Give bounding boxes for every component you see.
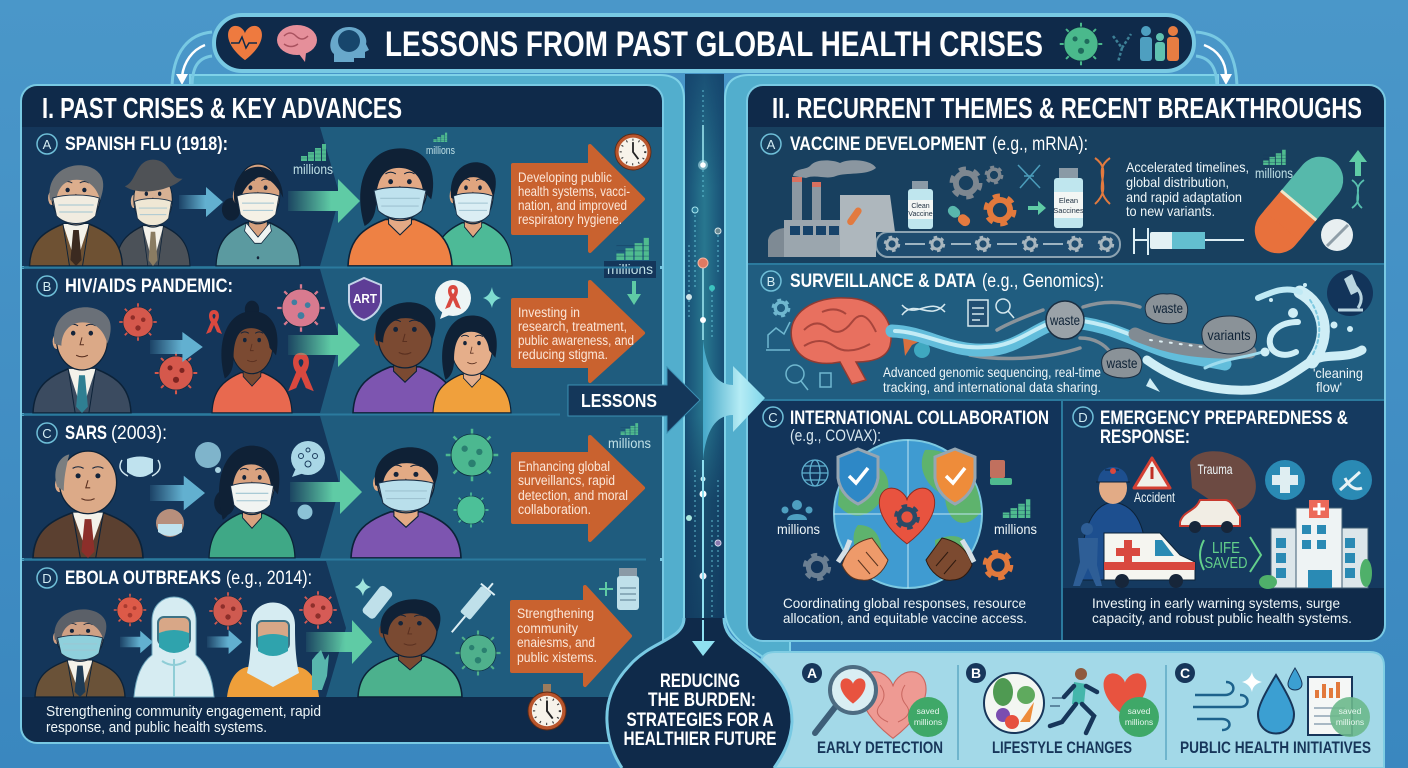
strategy A: early detection [802, 663, 948, 757]
millions icon small: millions [426, 145, 455, 157]
badge: saved millions: millions [1336, 717, 1364, 727]
millions icon: millions [1255, 165, 1293, 181]
description: capacity, and robust public health systems. [1092, 610, 1352, 626]
green arrow [1028, 201, 1046, 215]
badge: A [807, 665, 817, 681]
icon: small drop [1288, 668, 1302, 690]
trauma cloud [1190, 451, 1256, 510]
heading: (e.g., COVAX): [790, 426, 881, 445]
advance text [517, 606, 597, 665]
section heading band [22, 86, 662, 127]
row C: SARS [33, 423, 651, 558]
millions badge between rows [604, 238, 656, 305]
row B badge [37, 276, 57, 296]
callout text [624, 671, 776, 750]
arrow [150, 476, 205, 510]
icon: large ribbon [288, 353, 314, 391]
badge [761, 271, 781, 291]
badge: saved millions [1119, 697, 1159, 737]
water swirl [1147, 290, 1362, 390]
badge [1073, 407, 1093, 427]
strategy C: public health initiatives [1175, 663, 1371, 757]
icon: ART shield: ART [353, 291, 377, 306]
advance text: surveillancs, rapid [518, 473, 615, 488]
millions icon [293, 144, 333, 177]
badge: saved millions: saved [917, 706, 940, 716]
arrow: flow to right panel [703, 340, 765, 460]
advance text: Enhancing global [518, 459, 610, 474]
figure: woman [212, 301, 292, 413]
icon: red virus [299, 591, 337, 629]
clean water flow [892, 320, 1250, 364]
footer band [22, 697, 662, 742]
icon: stopwatch [528, 684, 566, 730]
brain [791, 298, 891, 384]
icon: microscope [1327, 270, 1373, 316]
badge: B [767, 274, 775, 289]
icon: people and millions: millions [777, 521, 820, 537]
icon: red virus [114, 594, 146, 626]
advance text: Strengthening [517, 606, 594, 621]
icon: data blocks [990, 460, 1012, 485]
icon: orange gear [985, 552, 1011, 578]
icon: virus [1060, 23, 1102, 65]
tablet [1321, 219, 1353, 251]
theme A: vaccine development [761, 134, 1367, 263]
figure: man in purple [353, 302, 457, 413]
icon: report chart [1308, 677, 1352, 735]
icon: head [330, 27, 369, 62]
panel: past crises and key advances [22, 86, 662, 742]
icon: plate of food [984, 673, 1044, 733]
millions icon [1255, 150, 1293, 181]
label: EARLY DETECTION [817, 738, 943, 757]
description [883, 364, 1101, 395]
vial right: Saccines [1053, 206, 1084, 215]
figure: hazmat worker [134, 597, 214, 697]
row D background [22, 561, 662, 697]
vial left: Clean [911, 203, 930, 210]
icon: speech bubble [291, 441, 325, 477]
capsule [1245, 147, 1353, 263]
callout text: STRATEGIES FOR A [626, 710, 774, 731]
icon: heart [1104, 673, 1146, 717]
waste cloud lower [1102, 348, 1142, 378]
row D: Ebola [35, 568, 639, 697]
badge: C [1180, 665, 1190, 681]
advance arrow [513, 146, 643, 251]
advance text: enaiesms, and [517, 635, 595, 650]
row C heading [65, 423, 167, 444]
description: Investing in early warning systems, surge [1092, 595, 1340, 611]
row A background [22, 127, 662, 266]
icon: instruments circle [1332, 460, 1372, 500]
row B heading: HIV/AIDS PANDEMIC: [65, 276, 233, 297]
arrow [306, 620, 372, 664]
section heading band [748, 86, 1384, 127]
advance text: public xistems. [517, 650, 597, 665]
section heading: I. PAST CRISES & KEY ADVANCES [42, 93, 402, 125]
small pill [946, 204, 972, 228]
icon: small globe [802, 460, 828, 486]
arrow: lessons: LESSONS [581, 391, 657, 411]
advance text: public awareness, and [518, 333, 634, 348]
description: allocation, and equitable vaccine access. [783, 610, 1027, 626]
genomic icons [902, 299, 1014, 326]
heading: (e.g., mRNA): [992, 134, 1088, 155]
description: global distribution, [1126, 174, 1229, 190]
icon: face mask [120, 456, 160, 477]
curved arrow: left from title [172, 32, 212, 90]
glowing nodes [686, 160, 721, 580]
advance text: detection, and moral [518, 488, 628, 503]
footer text: response, and public health systems. [46, 719, 267, 736]
paramedic [1081, 467, 1146, 580]
advance text [518, 459, 628, 517]
life saved label: SAVED [1204, 555, 1248, 572]
icon: green virus [456, 630, 500, 676]
row A badge [37, 134, 57, 154]
figure: woman with mask [209, 446, 295, 558]
figure: hazmat worker in orange [227, 602, 319, 697]
advance text: respiratory hygiene. [518, 212, 622, 227]
row C heading: (2003): [111, 423, 167, 444]
badge: saved millions: millions [1125, 717, 1153, 727]
icon: sparkle [483, 287, 501, 308]
heading: EMERGENCY PREPAREDNESS & [1100, 408, 1348, 429]
arrow [120, 631, 153, 653]
row C background [22, 416, 662, 558]
badge: saved millions [908, 697, 948, 737]
badge [802, 663, 822, 683]
badge: saved millions: millions [914, 717, 942, 727]
millions icon small [426, 133, 455, 157]
heading: INTERNATIONAL COLLABORATION [790, 408, 1049, 429]
row B background [748, 265, 1384, 400]
heading [790, 408, 1049, 445]
description [783, 595, 1027, 626]
millions icon: millions [293, 161, 333, 177]
life saved label: LIFE [1212, 540, 1240, 557]
callout text: REDUCING [660, 671, 740, 692]
advance text: nation, and improved [518, 198, 627, 213]
description: Accelerated timelines, [1126, 159, 1249, 175]
icon: dna strand [1113, 34, 1131, 62]
icon: gear [805, 555, 829, 579]
advance arrow [513, 282, 643, 381]
divider between themes C and D [1061, 400, 1063, 640]
waste cloud lower: waste [1106, 355, 1138, 371]
row C badge [37, 423, 57, 443]
footer text: Strengthening community engagement, rapid [46, 703, 321, 720]
orange and teal specks [903, 334, 930, 358]
icon: brain [277, 25, 317, 62]
icon: people and millions [777, 500, 820, 537]
cleaning flow label: 'cleaning [1313, 365, 1363, 381]
title text: LESSONS FROM PAST GLOBAL HEALTH CRISES [385, 25, 1043, 64]
small paramedic [1073, 523, 1102, 586]
row A: Spanish Flu [29, 133, 651, 266]
variants cloud [1202, 316, 1257, 354]
callout text: THE BURDEN: [648, 690, 756, 711]
row B: HIV/AIDS [33, 276, 643, 413]
figure: woman in orange [348, 148, 452, 266]
accident label: Accident [1134, 489, 1175, 505]
icon: clock [615, 134, 651, 170]
arrow [179, 187, 223, 217]
row C heading: SARS [65, 423, 107, 444]
badge [761, 134, 781, 154]
heart with gear [879, 488, 935, 544]
life saved label [1200, 537, 1261, 572]
icon: masked small head [156, 509, 184, 537]
icon: gloved hand [312, 650, 329, 690]
heading: SURVEILLANCE & DATA [790, 271, 976, 292]
icon: ART shield [349, 278, 381, 320]
panel: strategies [760, 652, 1384, 768]
description: and rapid adaptation [1126, 189, 1242, 205]
globe [834, 440, 982, 588]
variants cloud: variants [1208, 327, 1250, 343]
figure: man in green [434, 162, 512, 266]
guide line down to callout [702, 460, 704, 644]
shield right [935, 449, 975, 504]
row B badge: B [43, 279, 51, 294]
water droplets [1146, 283, 1353, 392]
badge: saved millions [1330, 697, 1370, 737]
badge: saved millions: saved [1339, 706, 1362, 716]
icon: small green virus [454, 492, 488, 528]
icon: medical cross circle [1265, 460, 1305, 500]
crashed car [1180, 500, 1240, 533]
waste blob: waste [1049, 312, 1080, 328]
icon: plus [599, 582, 613, 596]
advance text: community [517, 621, 578, 636]
connector frames and central column [190, 74, 1218, 665]
theme C: international collaboration [763, 407, 1049, 626]
arrow [288, 323, 360, 367]
heading: (e.g., Genomics): [982, 271, 1104, 292]
callout: reducing the burden [607, 618, 792, 768]
hand left [838, 538, 888, 580]
description: to new variants. [1126, 203, 1215, 219]
callout text: HEALTHIER FUTURE [624, 729, 776, 750]
description: tracking, and international data sharing. [883, 379, 1101, 395]
millions icon [608, 423, 651, 451]
arrow: down into circle [692, 620, 715, 656]
icon: heart [228, 26, 262, 60]
row C badge: C [42, 426, 52, 441]
badge: saved millions: saved [1128, 706, 1151, 716]
icon: brain heart [860, 672, 926, 738]
vial right: Elean [1059, 196, 1078, 205]
warning triangle [1134, 458, 1170, 488]
row D background [1063, 400, 1384, 640]
trauma cloud: Trauma [1198, 461, 1233, 477]
figure: masked woman [216, 164, 300, 266]
icon: runner [1050, 668, 1097, 733]
icon: vial [617, 568, 639, 610]
vial right [1053, 168, 1084, 228]
row A heading: SPANISH FLU (1918): [65, 134, 228, 155]
figure: man in purple [351, 447, 461, 558]
factory [768, 160, 895, 257]
badge: B [971, 665, 981, 681]
badge: C [768, 410, 778, 425]
dna helix [1095, 158, 1110, 204]
advance text: health systems, vacci- [518, 184, 630, 199]
row B background [22, 269, 662, 413]
advance text: research, treatment, [518, 319, 627, 334]
figure: masked man in brown suit [29, 165, 122, 266]
panel: recurrent themes and breakthroughs [748, 86, 1384, 640]
hospital [1259, 500, 1372, 589]
icon: large drop [1258, 675, 1294, 734]
icon: red blob [119, 303, 157, 341]
waste blob [1046, 301, 1084, 339]
advance arrow [512, 587, 630, 685]
icon: sparkle [1242, 672, 1262, 692]
icon: bars and millions [994, 499, 1037, 537]
dna with up arrow [1349, 150, 1367, 208]
description: Coordinating global responses, resource [783, 595, 1026, 611]
icon: large green virus [446, 429, 498, 481]
icon: people [1140, 26, 1179, 61]
row D heading: EBOLA OUTBREAKS [65, 568, 221, 589]
cleaning flow label: flow' [1316, 379, 1342, 395]
millions badge between rows: millions [607, 261, 653, 277]
theme B: surveillance and data [761, 270, 1373, 395]
advance text: collaboration. [518, 502, 591, 517]
icon: sparkle [355, 578, 371, 596]
divider lines in panels [22, 264, 1384, 560]
advance arrow [513, 437, 643, 540]
arrow [150, 332, 203, 362]
footer text [46, 703, 321, 736]
conveyor belt [876, 232, 1120, 257]
vial left [908, 181, 933, 229]
badge: A [767, 137, 776, 152]
icon: magnifier with heart [815, 667, 876, 733]
millions icon: millions [608, 435, 651, 451]
badge: D [1078, 410, 1088, 425]
description [1092, 595, 1352, 626]
waste cloud [1145, 294, 1188, 324]
figure: worried man [33, 307, 131, 413]
figure: woman in yellow [433, 315, 511, 413]
row A background [748, 127, 1384, 263]
icon: wind [1193, 682, 1248, 730]
shield left [838, 449, 878, 504]
title bar [214, 15, 1194, 71]
row D badge [37, 568, 57, 588]
advance text: Investing in [518, 305, 580, 320]
cleaning flow label [1313, 365, 1363, 395]
icon: red cell [155, 352, 197, 394]
arrow [207, 630, 242, 654]
arrow: lessons [568, 367, 700, 433]
badge [966, 663, 986, 683]
icon: bars and millions: millions [994, 521, 1037, 537]
advance text [518, 305, 634, 362]
arrow [290, 470, 362, 514]
heading: RESPONSE: [1100, 427, 1190, 448]
icon: small ribbon [206, 310, 222, 334]
icon: ribbon speech bubble [435, 280, 471, 319]
heading: VACCINE DEVELOPMENT [790, 134, 986, 155]
description [1126, 159, 1249, 219]
heading [1100, 408, 1348, 448]
figure: masked person with hat [116, 160, 190, 266]
strategy B: lifestyle changes [966, 663, 1159, 757]
icon: tilted vial [361, 584, 394, 620]
figure: man with mask [35, 609, 125, 697]
label: LIFESTYLE CHANGES [992, 738, 1132, 757]
ambulance [1104, 533, 1195, 588]
row C background [748, 400, 1061, 640]
description: Advanced genomic sequencing, real-time [883, 364, 1101, 380]
gears [952, 167, 1014, 224]
row D badge: D [42, 571, 52, 586]
badge [1175, 663, 1195, 683]
icon: droplet [298, 504, 312, 520]
hand right [926, 538, 974, 580]
arrow [288, 179, 360, 223]
badge [763, 407, 783, 427]
row D heading: (e.g., 2014): [226, 568, 312, 589]
advance text [518, 170, 630, 227]
figure: bald man [33, 451, 143, 558]
row A badge: A [43, 137, 52, 152]
small icons left [766, 300, 831, 390]
molecule [1018, 165, 1040, 188]
icon: virus [277, 284, 325, 332]
icon: syringe [445, 577, 500, 638]
curved arrow: right from title [1196, 32, 1237, 90]
waste cloud: waste [1152, 300, 1183, 316]
theme D: emergency preparedness [1073, 407, 1372, 626]
vial left: Vaccine [908, 211, 933, 218]
icon: red cell [209, 592, 247, 630]
icon: droplet bubble [195, 442, 221, 473]
syringe [1134, 228, 1244, 255]
grey debris streaks [970, 302, 1140, 359]
advance text: Developing public [518, 170, 612, 185]
data lines [689, 90, 718, 620]
advance text: reducing stigma. [518, 347, 608, 362]
figure: man in green [358, 599, 462, 697]
